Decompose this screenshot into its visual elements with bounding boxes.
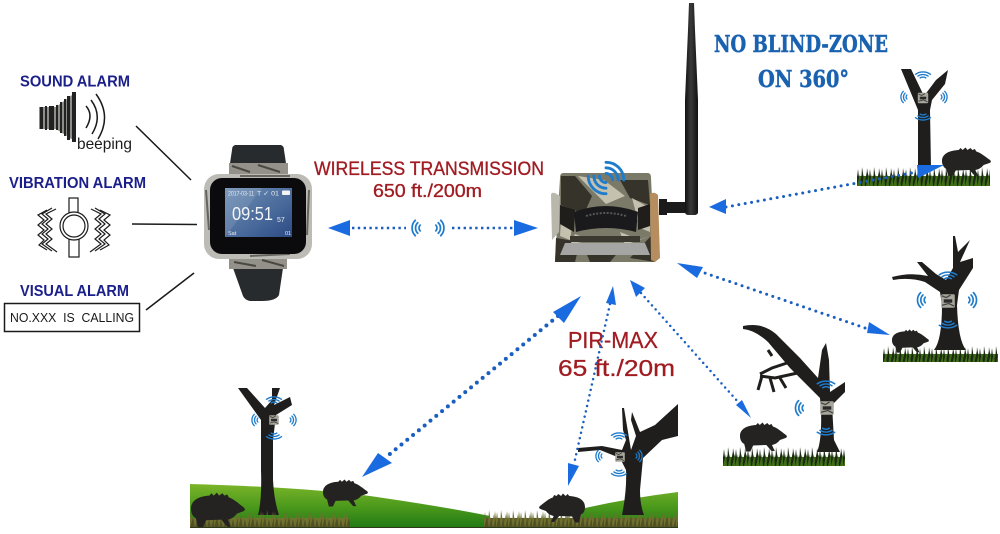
green hills [190, 484, 490, 528]
right tree [578, 404, 678, 515]
boar [740, 422, 787, 452]
mini camera: left tree [269, 415, 279, 425]
wifi waves [795, 381, 835, 435]
lower branches [758, 350, 812, 392]
wrist watch device [204, 145, 312, 301]
icon: speaker with beeping label [39, 92, 132, 153]
callout: visual alarm display [4, 304, 140, 332]
heading: no blind-zone on 360 [714, 31, 888, 93]
trail camera [551, 159, 660, 262]
tree [892, 236, 973, 350]
right boar [539, 494, 585, 522]
connector: vibration alarm to watch [132, 223, 197, 226]
PIR lens [574, 206, 638, 232]
scene: right tree and boar [883, 236, 998, 362]
wifi waves [901, 72, 947, 120]
arrow: camera to hillside far boar [362, 296, 581, 477]
side brackets [551, 193, 560, 240]
battery [282, 190, 290, 195]
beeping label: beeping [77, 136, 132, 153]
left tree [238, 388, 292, 515]
wifi waves: left tree [252, 397, 296, 439]
camouflage body [555, 173, 655, 262]
tree [743, 325, 845, 452]
status readout: T ✓ 01 [257, 190, 279, 198]
scene: lower right tree and boar [723, 325, 845, 466]
arrow: camera to lower right boar [630, 280, 751, 418]
lower lens panel [560, 243, 650, 255]
camera wifi waves [585, 159, 627, 197]
icon: signal waves [412, 220, 444, 236]
ground line [190, 527, 678, 528]
scene: hillside with trees and boars [190, 388, 678, 528]
date readout: 2017-03-11 [228, 190, 254, 198]
connector: visual alarm to watch [146, 273, 194, 310]
camo strap mounts [229, 163, 288, 269]
arrow: camera to right boar [677, 263, 890, 335]
callout: visual alarm display: NO.XXX IS CALLING [10, 310, 134, 325]
grass [723, 446, 845, 466]
mini camera [941, 294, 955, 308]
heading: visual alarm: VISUAL ALARM [20, 283, 129, 300]
range value: 650 ft./200m [373, 180, 482, 201]
grass [857, 166, 990, 186]
heading: wireless transmission [314, 159, 544, 201]
time readout: 09:51 [232, 204, 273, 224]
heading: sound alarm: SOUND ALARM [20, 74, 130, 90]
day readout: Sat [228, 231, 237, 237]
speaker cone [39, 92, 76, 142]
camo case [204, 174, 312, 259]
heading: PIR-MAX range: PIR-MAX [568, 327, 658, 353]
icon: vibrating watch [38, 198, 110, 257]
right grass [484, 508, 678, 528]
grass [883, 345, 998, 362]
wifi waves: right tree [596, 433, 642, 476]
arrow: camera to top right boar [709, 165, 944, 214]
second line: ON 360° [758, 66, 849, 93]
arrow: camera to hillside right boar [568, 286, 616, 486]
range value: 65 ft./20m [558, 355, 675, 381]
sound waves [86, 94, 105, 139]
mini camera: right tree [615, 452, 625, 462]
black face [210, 178, 306, 254]
boar [892, 329, 929, 353]
mini camera [820, 401, 834, 415]
dark lens mounts [560, 204, 650, 232]
seconds readout: 57 [277, 217, 285, 224]
far boar [323, 479, 368, 507]
connector: sound alarm to watch [136, 126, 191, 180]
tree [901, 69, 948, 168]
left grass [190, 508, 350, 528]
channel readout: 01 [285, 231, 291, 237]
camo pattern [555, 176, 655, 262]
boar [942, 148, 991, 176]
mini camera [918, 93, 928, 103]
near boar [191, 493, 245, 527]
heading: vibration alarm: VIBRATION ALARM [9, 175, 146, 192]
heading: PIR-MAX range [558, 327, 675, 381]
scene: top right tree and boar [857, 69, 991, 186]
wifi waves [917, 272, 977, 328]
heading: no blind-zone on 360: NO BLIND-ZONE [714, 31, 888, 58]
antenna [659, 3, 698, 215]
arrow: watch to camera wireless link [328, 220, 538, 236]
strap [229, 145, 287, 301]
lcd screen [225, 188, 292, 237]
heading: wireless transmission: WIRELESS TRANSMISSION [314, 159, 544, 180]
